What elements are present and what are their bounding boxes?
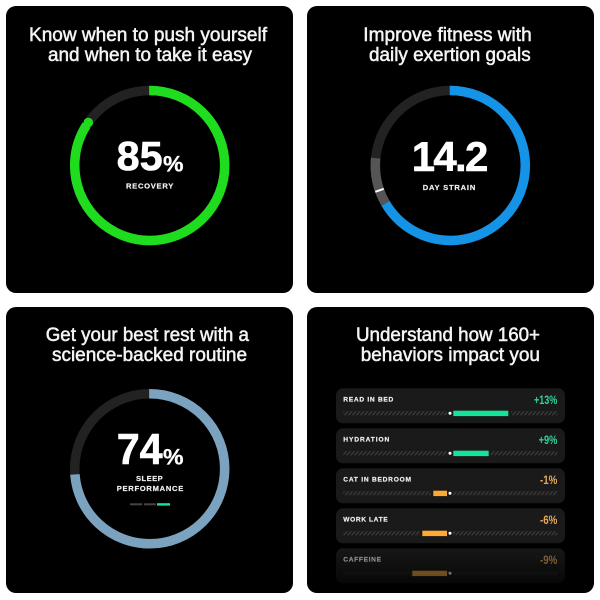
label: sleep performance: PERFORMANCE [117, 484, 183, 493]
ring: strain 14.2 [375, 90, 525, 240]
ring: recovery 85% [75, 90, 225, 240]
row: caffeine (faded) [336, 548, 565, 583]
sleep stage indicator [130, 503, 170, 506]
row: work late [336, 508, 565, 543]
heading: sleep [46, 325, 249, 366]
row: hydration [336, 428, 565, 463]
value: 85%: 85 [117, 133, 163, 179]
heading: sleep: Get your best rest with a [46, 325, 249, 346]
value: 85% [117, 133, 184, 179]
panel: behaviors [307, 307, 594, 593]
row: caffeine (faded): -9% [540, 553, 558, 567]
heading: day strain: Improve fitness with [363, 25, 532, 46]
row: read in bed: +13% [534, 393, 558, 407]
panel: day strain [307, 6, 594, 293]
heading: behaviors: Understand how 160+ [356, 325, 540, 346]
heading: recovery [29, 25, 268, 66]
heading: behaviors [356, 325, 540, 366]
label: sleep performance [117, 474, 183, 493]
heading: sleep: science-backed routine [52, 345, 247, 366]
heading: recovery: Know when to push yourself [29, 25, 268, 46]
panel: recovery [6, 6, 293, 293]
row: cat in bedroom [336, 468, 565, 503]
value: 14.2: 14.2 [412, 133, 488, 180]
panel: sleep performance [6, 307, 293, 593]
value: 74%: 74 [117, 425, 163, 474]
ring: sleep 74% [75, 394, 225, 544]
row: read in bed: READ IN BED [343, 397, 394, 404]
row: read in bed [336, 388, 565, 423]
row: hydration: HYDRATION [343, 437, 390, 444]
row: work late: -6% [540, 513, 558, 527]
row: cat in bedroom: -1% [540, 473, 558, 487]
heading: recovery: and when to take it easy [48, 45, 252, 66]
label: recovery: RECOVERY [126, 182, 173, 191]
value: 74%: % [163, 444, 184, 470]
value: 85%: % [163, 152, 184, 176]
heading: day strain: daily exertion goals [369, 45, 531, 66]
row: hydration: +9% [539, 433, 558, 447]
row: cat in bedroom: CAT IN BEDROOM [343, 477, 412, 484]
heading: behaviors: behaviors impact you [361, 345, 540, 366]
label: day strain: DAY STRAIN [423, 183, 475, 192]
row: work late: WORK LATE [343, 517, 388, 524]
label: sleep performance: SLEEP [136, 474, 163, 483]
heading: day strain [363, 25, 532, 66]
row: caffeine (faded): CAFFEINE [343, 557, 382, 564]
